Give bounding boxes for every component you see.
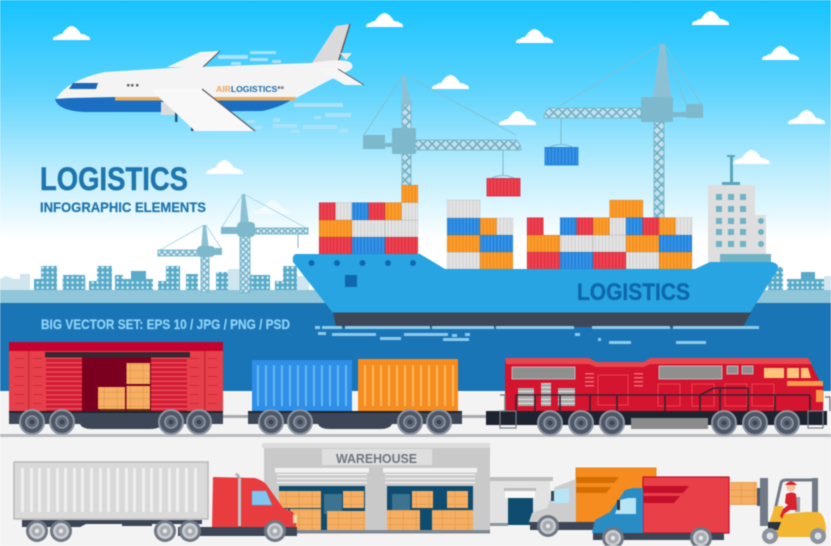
loco vents <box>518 388 534 406</box>
stabilizer <box>315 68 364 85</box>
subtitle: INFOGRAPHIC ELEMENTS <box>40 199 206 215</box>
blue belly <box>55 97 296 112</box>
coupler <box>462 415 488 418</box>
sky background <box>0 0 831 250</box>
orange stripe <box>115 97 295 100</box>
title: LOGISTICS <box>40 161 188 197</box>
red delivery truck <box>592 477 729 546</box>
boxcar interior <box>82 357 151 412</box>
flatcar with containers <box>248 359 462 434</box>
skyline city silhouette <box>0 266 831 290</box>
steps <box>500 411 516 428</box>
tractor frame <box>178 527 297 536</box>
loco windows <box>512 366 753 379</box>
crane large left with red container <box>363 75 521 196</box>
door rail <box>45 352 190 358</box>
portholes <box>308 260 416 266</box>
ground lower white background <box>0 250 831 546</box>
boxcar body <box>9 351 223 412</box>
pallet boxes <box>730 482 757 505</box>
mast <box>757 488 760 506</box>
cargo containers middle stack <box>447 200 513 269</box>
warehouse annex <box>490 477 553 526</box>
semi truck <box>14 462 297 542</box>
top wing <box>167 51 220 68</box>
trailer <box>14 462 208 519</box>
shore band <box>0 290 831 303</box>
title <box>40 161 206 215</box>
cockpit windows <box>69 83 98 89</box>
cabin dots <box>127 84 138 86</box>
road ground <box>0 437 831 546</box>
cab windows <box>764 368 811 378</box>
flatcar chassis <box>248 411 462 429</box>
loco frame <box>486 411 827 425</box>
landing gear <box>161 102 220 131</box>
warehouse sign <box>322 449 432 466</box>
wheels <box>538 411 562 435</box>
trailer chassis <box>22 520 202 527</box>
crane large right with blue container <box>544 44 703 218</box>
yellow body <box>768 506 826 537</box>
crane small right <box>221 194 308 293</box>
cargo containers left stack <box>319 185 418 254</box>
awning strips <box>275 468 477 483</box>
boxcar chassis <box>9 411 223 429</box>
right dock door with boxes <box>387 486 473 531</box>
hull name: LOGISTICS <box>577 279 690 306</box>
blue container <box>252 360 352 411</box>
hull waterline band <box>333 312 751 327</box>
loco roof <box>505 358 812 367</box>
livery text: AIRLOGISTICS** <box>216 84 285 94</box>
clouds <box>53 11 825 214</box>
airplane <box>55 24 364 133</box>
left dock door with boxes <box>279 486 365 531</box>
coupler <box>223 415 249 418</box>
fuselage <box>56 60 352 109</box>
ship bridge building <box>708 155 771 263</box>
big vector set caption: BIG VECTOR SET: EPS 10 / JPG / PNG / PSD <box>41 316 290 332</box>
forklift wheels <box>762 528 778 544</box>
sliding doors <box>46 358 82 412</box>
forklift with load <box>730 478 826 544</box>
cargo containers right stack <box>527 200 692 269</box>
speed lines <box>218 51 351 133</box>
loco railing <box>516 388 810 411</box>
cab <box>212 477 296 527</box>
boxcar <box>9 342 223 434</box>
orange container <box>358 359 458 411</box>
fuel tank <box>631 418 708 429</box>
hull hatch <box>345 275 357 287</box>
loco body <box>505 360 823 411</box>
rail line <box>0 434 831 437</box>
overhead guard <box>772 480 815 524</box>
wheels <box>20 410 44 434</box>
warehouse sign: WAREHOUSE <box>336 451 417 466</box>
crane small left <box>158 225 222 292</box>
boxcar roof <box>9 342 223 351</box>
wheels <box>26 520 48 542</box>
driver <box>780 482 797 519</box>
orange van <box>529 468 656 537</box>
lower wing <box>150 88 255 131</box>
tail fin <box>312 24 350 63</box>
warehouse <box>262 443 490 534</box>
water ripples <box>315 326 759 344</box>
cargo boxes <box>98 387 125 409</box>
exhaust stack <box>235 473 240 525</box>
locomotive <box>486 358 830 435</box>
sea <box>0 303 831 391</box>
cargo ship hull <box>293 254 778 327</box>
quay ground <box>0 391 831 436</box>
rear stabilizer far <box>340 53 352 60</box>
wheels <box>259 410 283 434</box>
